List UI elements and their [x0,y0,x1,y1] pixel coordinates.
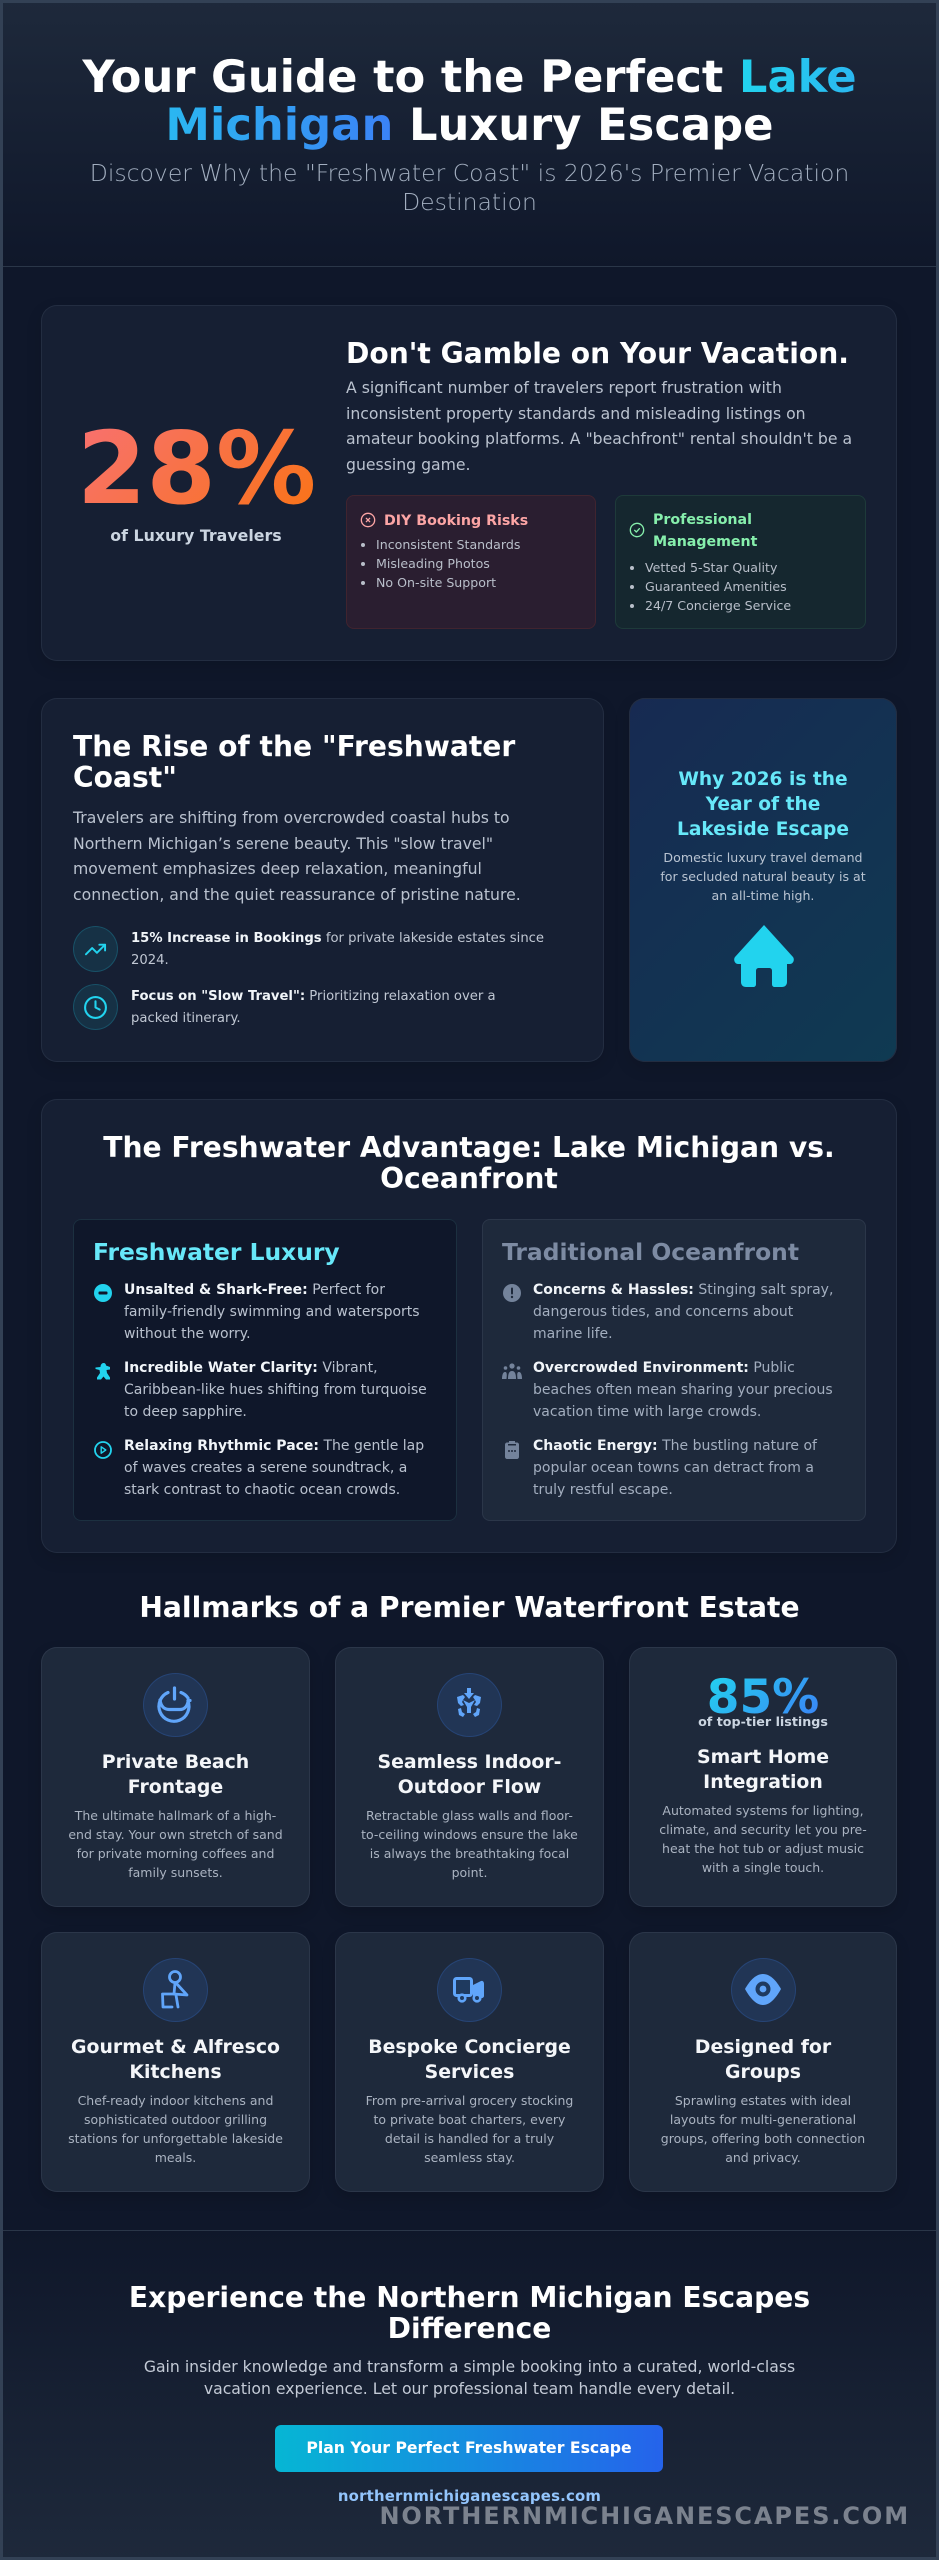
header band [0,0,939,267]
footer heading: Difference [388,2312,551,2345]
footer band [0,2230,939,2560]
description: is always the breathtaking focal [370,1846,569,1860]
stat: bookings increase [131,930,544,968]
description: Automated systems for lighting, [662,1802,864,1818]
item: rhythmic pace [124,1438,424,1498]
description: groups, offering both connection [661,2130,865,2146]
card: groups [629,1932,897,2192]
title: Services [425,2060,514,2082]
icon: trending up [73,926,118,972]
statistic caption: of top-tier listings [698,1714,828,1729]
item: water clarity [124,1360,427,1420]
DIY list: Inconsistent Standards [376,537,520,552]
description: detail is handled for a truly [385,2130,554,2146]
body text: movement emphasizes deep relaxation, meaningful [73,859,482,878]
item: concerns: marine life. [533,1326,613,1342]
icon: clock [73,984,118,1030]
title: Your Guide to the Perfect Lake [82,50,857,103]
watermark: NORTHERNMICHIGANESCAPES.COM [379,2502,910,2530]
DIY list: Misleading Photos [376,556,490,571]
subtitle: Discover Why the "Freshwater Coast" is 2026's Premier Vacation [90,159,849,187]
icon: clipboard [505,1441,519,1459]
professional title [653,512,758,550]
title [71,2036,280,2082]
statistic 85%: 85% [707,1670,819,1725]
item: chaotic energy: truly restful escape. [533,1482,673,1498]
description: stations for unforgettable lakeside [68,2130,283,2146]
description [366,2092,573,2164]
body text [72,808,521,904]
icon: truck [437,1958,502,2022]
item: chaotic energy: Chaotic Energy: The bustling nature of [533,1438,817,1454]
body text: Northern Michigan’s serene beauty. This "slow travel" [73,834,493,853]
description: and privacy. [725,2150,801,2164]
heading: Coast" [73,761,177,794]
item: rhythmic pace: stark contrast to chaotic ocean crowds. [124,1482,400,1498]
card: gourmet [41,1932,310,2192]
callout heading: Lakeside Escape [677,819,849,840]
footer text [0,2356,939,2400]
description: heat the hot tub or adjust music [662,1840,864,1856]
professional title: Management [653,534,757,550]
panel: traditional oceanfront [482,1219,866,1521]
description: with a single touch. [702,1860,824,1874]
callout text: Domestic luxury travel demand [663,850,863,865]
item: unsalted: family-friendly swimming and watersports [124,1304,420,1320]
title [377,1750,562,1798]
footer text: Gain insider knowledge and transform a simple booking into a curated, world-class [144,2357,795,2376]
title: Gourmet & Alfresco [71,2036,280,2058]
stat: slow travel: packed itinerary. [131,1010,241,1026]
subtitle [90,159,849,216]
description: family sunsets. [128,1864,223,1880]
title: Frontage [128,1776,223,1798]
item: unsalted: Unsalted & Shark-Free: Perfect for [124,1282,385,1298]
description: to private boat charters, every [374,2112,565,2126]
body text: amateur booking platforms. A "beachfront" rental shouldn't be a [346,429,852,448]
title: Kitchens [129,2060,222,2082]
heading: Don't Gamble on Your Vacation. [346,336,849,370]
body text: guessing game. [346,455,471,474]
body text: connection, and the quiet reassurance of pristine nature. [73,885,521,904]
footer heading [0,2282,939,2345]
item: overcrowded: Overcrowded Environment: Public [533,1360,795,1376]
panel: freshwater luxury [73,1219,457,1521]
description: Sprawling estates with ideal [675,2092,851,2108]
panel: DIY booking risks [346,495,596,629]
title [368,2036,571,2082]
description [661,2092,865,2164]
description: Chef-ready indoor kitchens and [78,2092,273,2108]
panel: professional management [615,495,866,629]
description [68,2092,283,2164]
callout text: for secluded natural beauty is at [660,869,866,884]
description: From pre-arrival grocery stocking [366,2092,573,2108]
site link: northernmichiganescapes.com [338,2487,601,2505]
icon: play circle [94,1441,112,1459]
heading: hallmarks: Hallmarks of a Premier Waterfront Estate [139,1591,800,1624]
title [102,1750,249,1798]
item: unsalted: without the worry. [124,1326,251,1342]
DIY list [361,537,520,590]
stat: bookings increase: 2024. [131,952,169,968]
item: water clarity: to deep sapphire. [124,1404,247,1420]
column title: Traditional Oceanfront [502,1238,799,1266]
professional list: 24/7 Concierge Service [645,598,791,613]
body text [346,378,852,474]
body text: inconsistent property standards and misleading listings on [346,404,806,423]
title: Seamless Indoor- [377,1750,562,1772]
description: for private morning coffees and [77,1846,274,1860]
icon: house [734,925,794,987]
item: rhythmic pace: Relaxing Rhythmic Pace: The gentle lap [124,1438,424,1454]
description: to-ceiling windows ensure the lake [361,1826,578,1842]
professional list: Vetted 5-Star Quality [645,560,777,575]
call to action button [275,2425,663,2472]
DIY list: No On-site Support [376,575,496,590]
title: Integration [703,1770,823,1792]
description: meals. [155,2150,196,2164]
callout heading: Why 2026 is the [678,769,848,790]
icon: arrows [437,1673,502,1737]
item: chaotic energy: popular ocean towns can detract from a [533,1460,814,1476]
callout heading [677,769,849,840]
title [82,50,857,151]
icon: beach [143,1673,208,1737]
DIY title: DIY Booking Risks [384,512,528,528]
description: point. [452,1864,487,1880]
heading [103,1131,835,1195]
big statistic 28%: 28% [77,410,316,527]
professional list [630,560,791,613]
footer heading: Experience the Northern Michigan Escapes [129,2280,810,2314]
heading [73,730,516,794]
column title: Freshwater Luxury [93,1238,340,1266]
panel: freshwater advantage [41,1099,897,1553]
card: smart home [629,1647,897,1907]
callout text [660,850,866,903]
heading: The Freshwater Advantage: Lake Michigan vs. [103,1131,835,1164]
callout heading: Year of the [706,794,820,815]
subtitle: Destination [402,188,537,216]
description [68,1808,283,1880]
stat: bookings increase: 15% Increase in Bookings for private lakeside estates since [131,930,544,946]
card: private beach [41,1647,310,1907]
card: concierge [335,1932,604,2192]
description: Retractable glass walls and floor- [366,1808,573,1822]
footer text: vacation experience. Let our professional team handle every detail. [204,2379,735,2398]
stat: slow travel [131,988,496,1026]
call to action button: Plan Your Perfect Freshwater Escape [306,2438,632,2457]
item: concerns [533,1282,833,1342]
title: Michigan Luxury Escape [165,98,774,151]
panel: don't gamble [41,305,897,661]
title: Smart Home [697,1746,829,1768]
professional list: Guaranteed Amenities [645,579,787,594]
icon: crowd [502,1363,522,1379]
description: climate, and security let you pre- [659,1822,867,1836]
title: Outdoor Flow [398,1776,541,1798]
title: Bespoke Concierge [368,2036,571,2058]
icon: eye [731,1958,796,2022]
item: unsalted [124,1282,420,1342]
title: Private Beach [102,1750,249,1772]
body text: A significant number of travelers report frustration with [346,378,782,397]
item: water clarity: Caribbean-like hues shifting from turquoise [124,1382,427,1398]
icon: alert circle [503,1284,521,1302]
heading: Oceanfront [380,1162,558,1195]
icon: minus circle [94,1284,112,1302]
item: water clarity: Incredible Water Clarity: Vibrant, [124,1360,378,1376]
item: chaotic energy [533,1438,818,1498]
icon: x circle [360,512,376,528]
title: Designed for [695,2036,831,2058]
title: Groups [725,2060,801,2082]
item: concerns: Concerns & Hassles: Stinging salt spray, [533,1282,833,1298]
callout text: an all-time high. [712,888,814,903]
description [659,1802,867,1874]
description: layouts for multi-generational [670,2112,856,2126]
professional title: Professional [653,512,752,528]
stat: slow travel: Focus on "Slow Travel": Prioritizing relaxation over a [131,988,496,1004]
item: overcrowded: vacation time with large crowds. [533,1404,761,1420]
item: overcrowded [533,1360,833,1420]
description: end stay. Your own stretch of sand [68,1826,283,1842]
card: indoor outdoor [335,1647,604,1907]
panel: rise of the freshwater coast [41,698,604,1062]
item: overcrowded: beaches often mean sharing your precious [533,1382,833,1398]
title [697,1746,829,1792]
description [361,1808,578,1880]
icon: check circle [630,522,644,538]
description: sophisticated outdoor grilling [84,2112,267,2126]
title [695,2036,832,2082]
statistic caption: of Luxury Travelers [110,526,282,545]
description: seamless stay. [424,2150,515,2164]
icon: figure [96,1363,110,1380]
item: concerns: dangerous tides, and concerns about [533,1304,793,1320]
body text: Travelers are shifting from overcrowded coastal hubs to [73,808,510,827]
panel: why 2026 [629,698,897,1062]
icon: chef figure [143,1958,208,2022]
description: The ultimate hallmark of a high- [75,1808,276,1822]
heading: The Rise of the "Freshwater [73,730,515,762]
item: rhythmic pace: of waves creates a serene soundtrack, a [124,1460,407,1476]
